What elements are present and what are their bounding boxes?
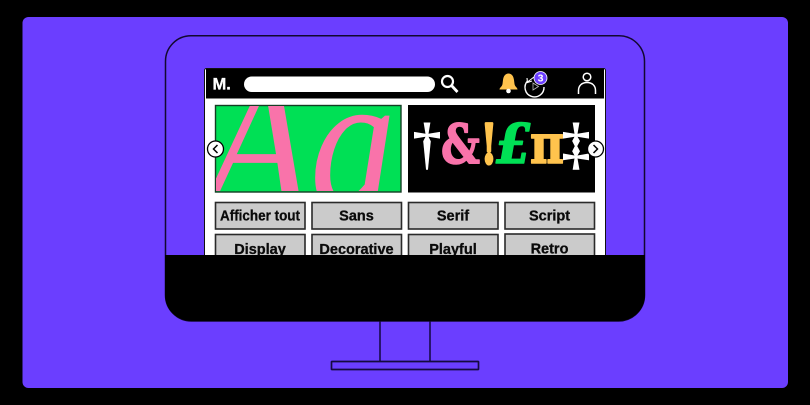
search field (244, 76, 435, 92)
button: Retro (504, 233, 596, 255)
header bar (206, 69, 604, 98)
card: green Aa specimen (214, 104, 402, 193)
button: Script: Script (529, 208, 570, 224)
button: Retro: Retro (531, 242, 569, 258)
specimen letters: Aa (195, 32, 396, 251)
ampersand: & (441, 112, 480, 176)
button: Serif (408, 202, 498, 229)
left carousel arrow (208, 141, 224, 157)
monitor (165, 32, 645, 321)
button: Afficher tout (216, 202, 305, 229)
button: Playful: Playful (429, 242, 477, 258)
logo: M. (212, 76, 231, 94)
monitor chin (165, 255, 645, 321)
screen background (204, 68, 606, 258)
button: Script (505, 202, 594, 229)
icon: bell (500, 74, 518, 93)
monitor stand (332, 321, 478, 370)
pound: £ (496, 112, 531, 176)
icon: search (442, 76, 458, 92)
right carousel arrow (588, 141, 604, 157)
button: Display: Display (234, 242, 286, 258)
screen (204, 68, 606, 255)
pi: π (530, 112, 564, 176)
button: Serif: Serif (437, 208, 469, 224)
button: Afficher tout: Afficher tout (220, 208, 300, 224)
dagger glyph: † (412, 111, 442, 176)
category buttons (216, 202, 594, 261)
button: Decorative (311, 234, 402, 255)
button: Playful (408, 234, 499, 255)
icon: history with badge: 3 (538, 73, 544, 85)
double dagger glyph: ‡ (562, 111, 590, 176)
button: Sans: Sans (339, 208, 374, 224)
exclamation: ! (481, 112, 497, 176)
button: Sans (312, 202, 402, 229)
icon: history with badge (525, 72, 547, 97)
card: black glyph specimen (408, 105, 595, 192)
button: Display (214, 234, 306, 255)
icon: user (578, 73, 596, 94)
monitor frame (166, 36, 644, 321)
button: Decorative: Decorative (319, 242, 394, 258)
